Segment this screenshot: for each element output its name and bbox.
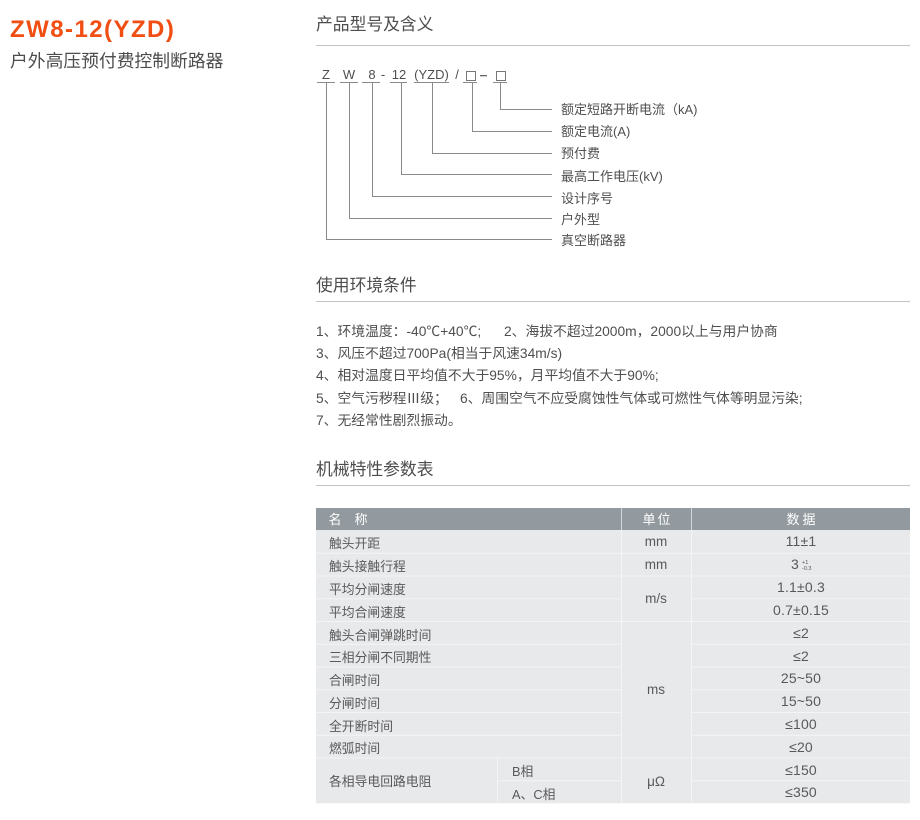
operating conditions list: 4、相对温度日平均值不大于95%，月平均值不大于90%; <box>316 368 659 383</box>
parameter names: A、C相 <box>512 787 555 802</box>
values: 11±1 <box>786 533 816 549</box>
units: mm <box>645 557 667 572</box>
values: ≤150 <box>785 762 817 778</box>
connector lines <box>317 82 552 240</box>
title <box>10 16 224 71</box>
parameter names: 触头接触行程 <box>329 559 406 574</box>
values: 25~50 <box>781 670 821 686</box>
table body background <box>316 530 910 803</box>
values: +1 <box>802 560 808 566</box>
units: ms <box>647 682 665 697</box>
table header: 单 <box>642 512 656 527</box>
heading: operating conditions: 使用环境条件 <box>316 275 417 295</box>
values: ≤2 <box>793 625 809 641</box>
operating conditions list: 6、周围空气不应受腐蚀性气体或可燃性气体等明显污染; <box>460 390 803 406</box>
diagram labels <box>561 102 698 248</box>
table header: 称 <box>354 512 368 527</box>
values: 1.1±0.3 <box>777 579 825 595</box>
operating conditions list: 1、环境温度：-40℃+40℃; <box>316 324 481 339</box>
model code letters: W <box>343 67 356 82</box>
model code letters <box>322 67 506 82</box>
heading: model meaning: 产品型号及含义 <box>316 15 434 34</box>
diagram labels: 额定电流(A) <box>561 124 630 139</box>
parameter names: B相 <box>512 764 533 779</box>
parameter names: 合闸时间 <box>329 673 380 688</box>
values: -0.3 <box>802 566 811 572</box>
values: ≤100 <box>785 716 817 732</box>
operating conditions list: 3、风压不超过700Pa(相当于风速34m/s) <box>316 346 562 361</box>
operating conditions list: 2、海拔不超过2000m，2000以上与用户协商 <box>504 323 778 339</box>
diagram labels: 额定短路开断电流（kA) <box>561 102 698 117</box>
diagram labels: 最高工作电压(kV) <box>561 169 663 184</box>
mechanical parameters table <box>316 508 910 803</box>
table header: 名 <box>328 512 342 527</box>
operating conditions list <box>316 323 803 428</box>
diagram labels: 预付费 <box>561 146 600 161</box>
units: μΩ <box>647 774 665 789</box>
values: ≤20 <box>789 739 813 755</box>
operating conditions list: 7、无经常性剧烈振动。 <box>316 413 462 428</box>
parameter names: 平均合闸速度 <box>329 605 406 620</box>
diagram labels: 设计序号 <box>561 191 613 206</box>
model code letters: - <box>381 67 385 82</box>
parameter names: 触头合闸弹跳时间 <box>329 628 431 643</box>
table rules <box>316 530 910 803</box>
parameter names: 全开断时间 <box>329 719 393 734</box>
values: ≤2 <box>793 648 809 664</box>
parameter names: 各相导电回路电阻 <box>329 774 432 789</box>
parameter names: 分闸时间 <box>329 696 380 711</box>
parameter names: 平均分闸速度 <box>329 582 406 597</box>
table header <box>316 508 910 530</box>
model code letters: 12 <box>392 67 406 82</box>
table header: 数 <box>786 512 800 527</box>
model code letters: / <box>455 67 459 82</box>
values: ≤350 <box>785 784 817 800</box>
model code letters: 8 <box>368 67 376 82</box>
values: 0.7±0.15 <box>773 602 829 618</box>
units: mm <box>645 534 667 549</box>
values <box>773 533 829 800</box>
table header: 据 <box>802 512 816 527</box>
title: ZW8-12(YZD) <box>10 16 175 43</box>
model code letters: (YZD) <box>414 67 449 82</box>
parameter names: 触头开距 <box>329 536 380 551</box>
values: 15~50 <box>781 693 821 709</box>
parameter names <box>329 536 555 802</box>
model code diagram <box>317 67 698 248</box>
parameter names: 三相分闸不同期性 <box>329 650 432 665</box>
model code letters: Z <box>322 67 330 82</box>
units: m/s <box>645 591 667 606</box>
diagram labels: 户外型 <box>561 212 600 227</box>
diagram labels: 真空断路器 <box>561 233 626 248</box>
operating conditions list: 5、空气污秽程Ⅲ级； <box>316 391 448 407</box>
title: 户外高压预付费控制断路器 <box>10 51 224 71</box>
table header: 位 <box>657 512 671 527</box>
values: 3 <box>791 556 799 572</box>
units <box>645 534 667 789</box>
heading: mechanical parameters: 机械特性参数表 <box>316 460 434 479</box>
parameter names: 燃弧时间 <box>329 741 380 756</box>
